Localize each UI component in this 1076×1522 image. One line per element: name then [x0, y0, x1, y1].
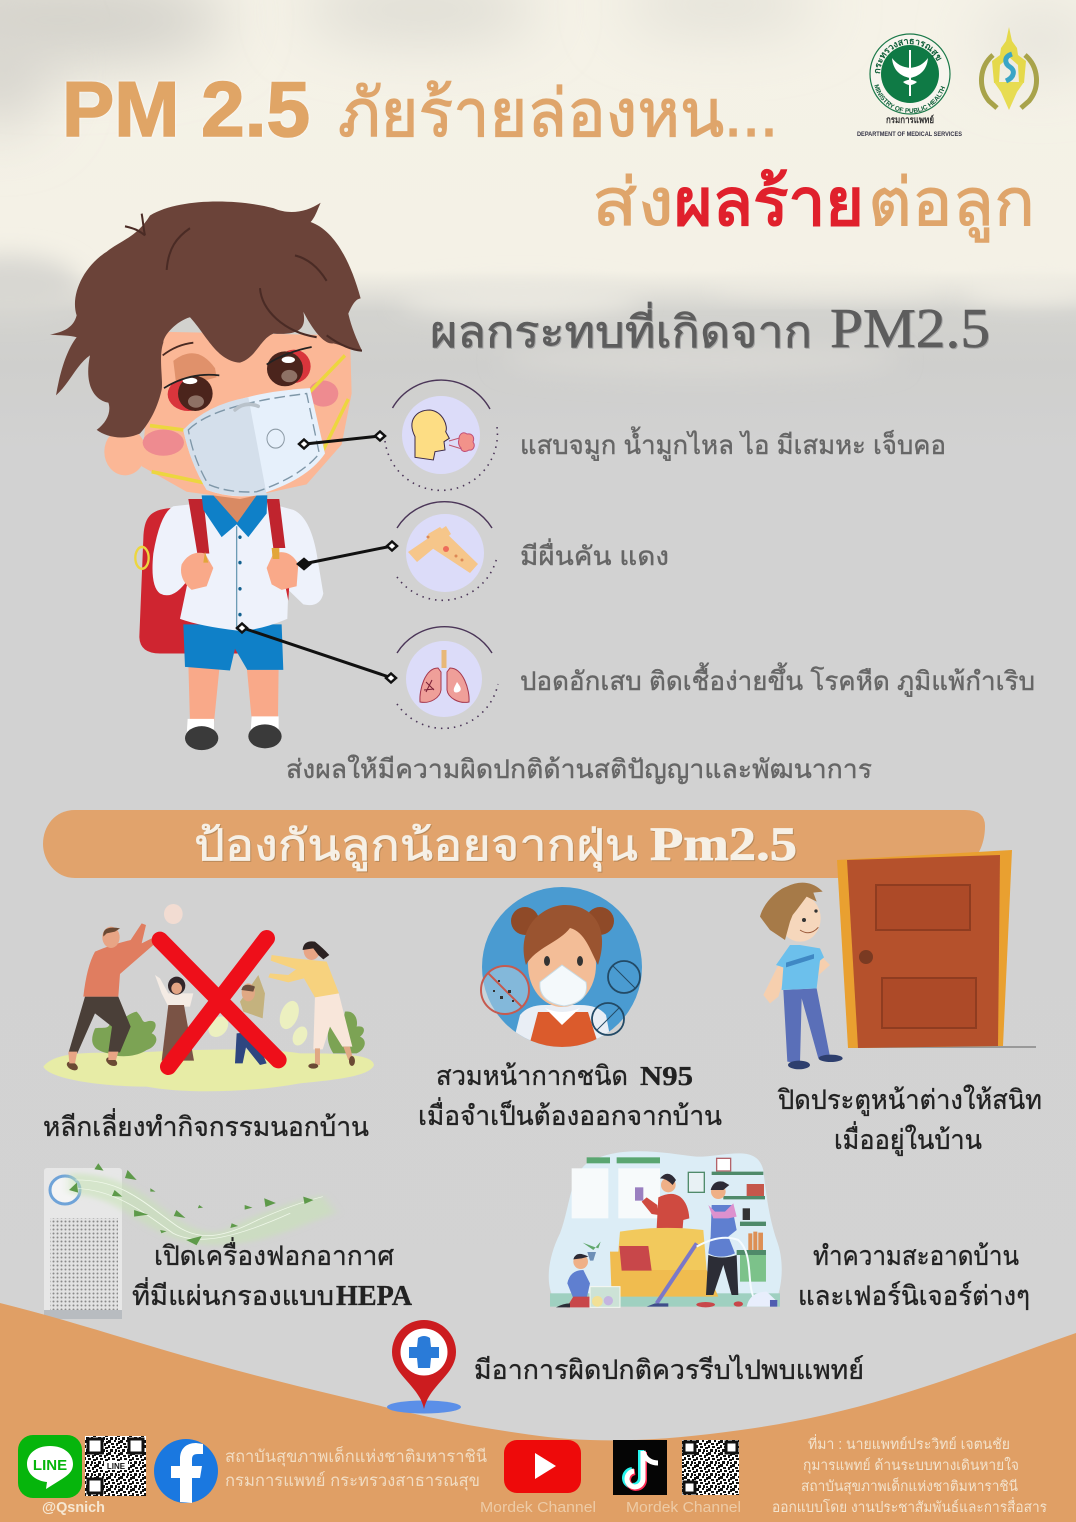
development note: ส่งผลให้มีความผิดปกติด้านสติปัญญาและพัฒนาการ — [286, 754, 872, 784]
caption: see a doctor: มีอาการผิดปกติควรรีบไปพบแพทย์ — [474, 1354, 864, 1385]
caption: close doors and windows: ปิดประตูหน้าต่างให้สนิท — [778, 1084, 1042, 1116]
illustration: door — [837, 850, 1036, 1048]
title — [62, 65, 1035, 243]
caption: avoid outdoor activity: หลีกเลี่ยงทำกิจกรรมนอกบ้าน — [43, 1108, 369, 1142]
caption: wear N95: N95 — [640, 1061, 693, 1091]
caption: clean house and furniture: ทำความสะอาดบ้าน — [813, 1241, 1019, 1271]
icon: Facebook — [154, 1439, 218, 1503]
organisation text: สถาบันสุขภาพเด็กแห่งชาติมหาราชินี — [225, 1445, 487, 1467]
logo: ministry of public health — [857, 33, 963, 138]
heading: effects of PM2.5: PM2.5 — [830, 298, 990, 360]
symptom text 1: แสบจมูก น้ำมูกไหล ไอ มีเสมหะ เจ็บคอ — [520, 426, 946, 461]
caption: clean house and furniture: และเฟอร์นิเจอร์ต่างๆ — [798, 1280, 1030, 1311]
heading: effects of PM2.5: ผลกระทบที่เกิดจาก — [430, 301, 812, 357]
illustration: air purifier — [44, 1163, 336, 1319]
title: ต่อลูก — [868, 165, 1035, 243]
icon: TikTok — [613, 1440, 667, 1495]
channel labels — [480, 1499, 741, 1516]
channel labels: Mordek Channel — [480, 1499, 596, 1516]
title: ผลร้าย — [674, 165, 864, 239]
icon: hospital location pin — [387, 1320, 461, 1414]
icon: LINE: LINE — [33, 1457, 67, 1474]
hair — [50, 201, 362, 438]
caption: wear N95 — [418, 1061, 722, 1131]
banner: protect children — [43, 810, 985, 878]
QR code: LINE: LINE — [107, 1462, 126, 1471]
organisation text — [225, 1445, 487, 1491]
handle: @Qsnich — [42, 1499, 105, 1516]
caption: air purifier with HEPA: เปิดเครื่องฟอกอากาศ — [154, 1237, 394, 1271]
illustration: boy beside door — [760, 883, 843, 1069]
logo: ministry of public health: DEPARTMENT OF MEDICAL SERVICES — [857, 131, 963, 138]
banner: protect children: ป้องกันลูกน้อยจากฝุ่น — [194, 822, 638, 872]
mask — [183, 388, 325, 496]
icon: skin rash — [397, 502, 497, 600]
caption: air purifier with HEPA: ที่มีแผ่นกรองแบบ — [132, 1277, 334, 1311]
QR code: LINE — [85, 1436, 146, 1496]
caption: air purifier with HEPA: HEPA — [336, 1280, 412, 1312]
illustration: girl wearing mask — [481, 887, 642, 1050]
girl — [155, 975, 193, 1007]
callout lines — [237, 432, 397, 682]
heading: effects of PM2.5 — [430, 298, 990, 360]
title: ภัยร้ายล่องหน... — [338, 76, 778, 150]
credits: ออกแบบโดย งานประชาสัมพันธ์และการสื่อสาร — [772, 1497, 1047, 1516]
QR code: TikTok — [682, 1440, 739, 1495]
logo: ministry of public health: กระทรวงสาธารณสุข — [874, 38, 942, 74]
caption: close doors and windows — [778, 1084, 1042, 1156]
boy — [240, 975, 265, 1018]
title: ส่ง — [592, 165, 674, 239]
caption: close doors and windows: เมื่ออยู่ในบ้าน — [834, 1121, 982, 1156]
head — [104, 332, 352, 499]
organisation text: กรมการแพทย์ กระทรวงสาธารณสุข — [225, 1471, 480, 1491]
icon: lungs — [397, 627, 498, 728]
icon: YouTube — [504, 1440, 581, 1493]
illustration: outdoor activity crossed out — [43, 904, 374, 1091]
caption: wear N95: สวมหน้ากากชนิด — [436, 1061, 628, 1091]
caption: air purifier with HEPA — [132, 1237, 412, 1312]
caption: wear N95: เมื่อจำเป็นต้องออกจากบ้าน — [418, 1097, 722, 1131]
credits: ที่มา : นายแพทย์ประวิทย์ เจตนชัย — [808, 1434, 1010, 1453]
icon: LINE — [18, 1435, 82, 1498]
icon: sneezing head — [385, 380, 497, 490]
symptom text 2: มีผื่นคัน แดง — [520, 538, 669, 571]
symptom text 3: ปอดอักเสบ ติดเชื้อง่ายขึ้น โรคหืด ภูมิแพ้กำเริบ — [520, 662, 1035, 697]
woman — [313, 992, 352, 1049]
title: PM 2.5 — [62, 65, 310, 153]
illustration: family cleaning — [549, 1151, 782, 1307]
credits — [772, 1434, 1047, 1516]
credits: กุมารแพทย์ ด้านระบบทางเดินหายใจ — [803, 1456, 1019, 1474]
logo: medical crest — [981, 27, 1037, 110]
footer wave — [0, 1303, 1076, 1522]
logo: ministry of public health: MINISTRY OF PUBLIC HEALTH — [874, 84, 946, 113]
caption: clean house and furniture — [798, 1241, 1030, 1311]
man — [68, 997, 131, 1053]
red X — [160, 938, 278, 1067]
credits: สถาบันสุขภาพเด็กแห่งชาติมหาราชินี — [801, 1476, 1018, 1495]
logo: ministry of public health: กรมการแพทย์ — [886, 114, 934, 126]
boy with mask — [50, 201, 362, 750]
channel labels: Mordek Channel — [626, 1499, 741, 1516]
banner: protect children: Pm2.5 — [650, 818, 797, 871]
